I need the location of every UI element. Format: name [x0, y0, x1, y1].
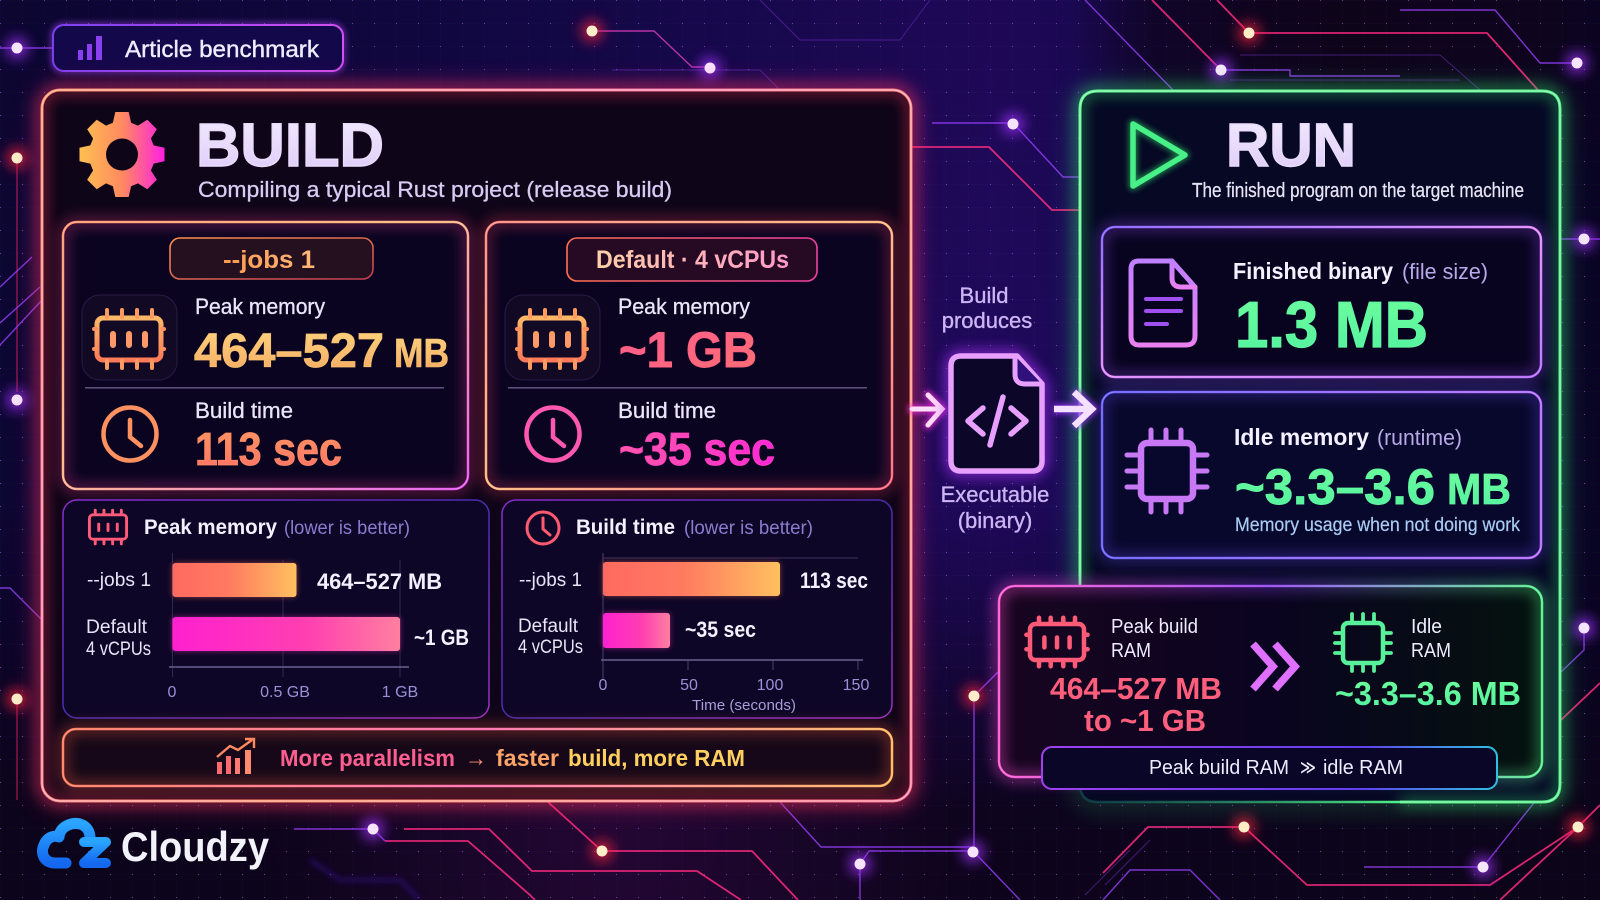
value: 35 sec: ~35 sec [619, 423, 775, 475]
bar: default: Default [86, 617, 148, 638]
heading: run: RUN [1226, 111, 1356, 179]
takeaway text: → [465, 745, 487, 771]
takeaway text: build, more RAM [568, 745, 745, 771]
bar: default [518, 613, 756, 658]
value: 113 sec: 113 sec [195, 423, 342, 475]
icon: clock [526, 408, 580, 460]
label: idle ram: RAM [1411, 640, 1451, 662]
chart title: (lower is better) [284, 518, 410, 539]
chart: peak memory [63, 500, 489, 718]
arrow: build to binary [912, 395, 942, 425]
takeaway text [280, 745, 745, 771]
label: executable: Executable [941, 482, 1049, 507]
label: idle ram [1411, 616, 1451, 662]
axis labels [168, 684, 418, 701]
chart axes [601, 553, 863, 679]
axis labels: 100 [757, 677, 783, 694]
label: build produces: Build [960, 283, 1008, 308]
banner: takeaway [63, 729, 892, 786]
icon: idle chip [1335, 614, 1391, 671]
label: executable: (binary) [958, 508, 1032, 533]
icon: play [1133, 124, 1185, 186]
bar: jobs 1 [87, 563, 442, 597]
subtitle: run: The finished program on the target machine [1192, 180, 1524, 202]
icon: memory [82, 295, 177, 380]
bar: default: ~1 GB [414, 625, 469, 650]
icon: gear [80, 112, 164, 197]
icon: much greater than [1253, 644, 1295, 689]
subtitle: build: Compiling a typical Rust project (release build) [198, 177, 672, 202]
label: build time: Build time [195, 398, 293, 423]
note: idle memory: Memory usage when not doing work [1235, 515, 1520, 536]
label: build produces [942, 283, 1032, 333]
icon: executable file [951, 356, 1042, 471]
icon: chip [1127, 430, 1207, 512]
bar: jobs 1: --jobs 1 [87, 570, 151, 591]
label: build produces: produces [942, 308, 1032, 333]
chart title: Peak memory [144, 516, 277, 539]
label: finished binary: Finished binary [1233, 258, 1393, 284]
value: 1.3 MB: 1.3 MB [1235, 288, 1428, 361]
label: executable [941, 482, 1049, 533]
bar: default: 4 vCPUs [86, 639, 151, 660]
bar: jobs 1: 464–527 MB [317, 569, 442, 594]
label: idle memory: (runtime) [1377, 425, 1462, 450]
label: peak memory: Peak memory [618, 294, 750, 319]
axis labels: 0 [168, 684, 177, 701]
bar: jobs 1 [519, 562, 868, 596]
value: 464-527 MB: MB [394, 330, 449, 376]
label: idle memory: Idle memory [1234, 424, 1369, 450]
panel: ram comparison [999, 586, 1542, 789]
wordmark: Cloudzy [121, 823, 270, 870]
pill: peak vs idle: Peak build RAM [1149, 757, 1289, 779]
axis labels: 150 [843, 677, 869, 694]
pill: peak vs idle [1042, 747, 1497, 789]
badge: article benchmark [53, 25, 343, 71]
takeaway text: faster [496, 745, 559, 771]
value: peak build ram [1050, 671, 1222, 738]
chart axes [169, 553, 409, 677]
pill: default: Default · 4 vCPUs [596, 246, 789, 274]
axis labels: 0 [599, 677, 608, 694]
axis labels: 0.5 GB [260, 684, 310, 701]
label: finished binary [1233, 258, 1488, 284]
icon: peak build memory [1026, 618, 1088, 666]
value: peak build ram: 464–527 MB [1050, 671, 1222, 706]
label: peak memory: Peak memory [195, 294, 325, 319]
logo: cloudzy [42, 823, 270, 870]
card: idle memory [1102, 392, 1541, 558]
panel: run [1079, 91, 1560, 802]
panel: build [42, 90, 911, 801]
bar: jobs 1: 113 sec [800, 568, 868, 593]
pill: jobs 1 [170, 238, 373, 279]
card: finished binary [1102, 227, 1541, 377]
chart title: (lower is better) [684, 518, 813, 539]
bar: default: Default [518, 616, 579, 637]
arrow: binary to run [1054, 392, 1092, 426]
icon: bar chart [78, 36, 102, 60]
icon: memory [505, 295, 600, 380]
value: idle memory: MB [1447, 465, 1511, 514]
badge label: Article benchmark [125, 36, 320, 62]
icon: clock [104, 408, 156, 460]
value: idle memory: ~3.3–3.6 [1235, 459, 1435, 515]
pill: peak vs idle: idle RAM [1323, 757, 1403, 779]
chart title [144, 516, 410, 539]
label: idle ram: Idle [1411, 616, 1442, 638]
bar: jobs 1: --jobs 1 [519, 570, 582, 591]
pill: jobs 1: --jobs 1 [223, 246, 315, 274]
bar: default: 4 vCPUs [518, 637, 583, 658]
label: idle memory [1234, 424, 1462, 450]
pill: default [567, 238, 817, 281]
icon: clock [527, 512, 559, 544]
pill: peak vs idle: ≫ [1300, 757, 1316, 779]
value: 1 GB: ~1 GB [619, 322, 757, 378]
axis title: Time (seconds) [692, 697, 796, 714]
card: default 4 vCPUs [486, 222, 892, 489]
heading: build: BUILD [196, 111, 384, 179]
label: peak build ram: Peak build [1111, 616, 1198, 638]
chart: build time [502, 500, 892, 718]
value: peak build ram: to ~1 GB [1084, 703, 1206, 738]
axis labels [599, 677, 869, 694]
label: peak build ram: RAM [1111, 640, 1151, 662]
icon: memory [89, 510, 127, 544]
chart title [576, 516, 813, 539]
value: idle ram: ~3.3–3.6 MB [1335, 675, 1521, 712]
label: finished binary: (file size) [1402, 259, 1488, 284]
bar: default: ~35 sec [685, 617, 756, 642]
icon: cloud [42, 824, 106, 863]
label: peak build ram [1111, 616, 1198, 662]
axis labels: 50 [680, 677, 698, 694]
chart title: Build time [576, 516, 675, 539]
icon: rising chart [217, 739, 254, 774]
label: build time: Build time [618, 398, 716, 423]
card: jobs 1 [63, 222, 468, 489]
value: 464-527 MB: 464–527 [194, 325, 384, 378]
axis labels: 1 GB [382, 684, 418, 701]
bar: default [86, 617, 469, 660]
takeaway text: More parallelism [280, 745, 455, 771]
icon: document [1131, 261, 1195, 345]
